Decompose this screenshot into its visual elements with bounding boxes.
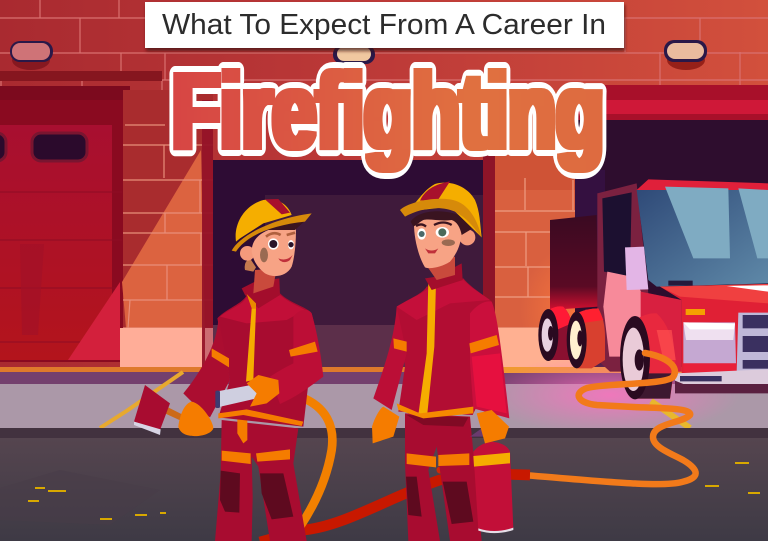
legs bbox=[405, 413, 482, 541]
brick pillar: right bbox=[483, 90, 660, 380]
jacket bbox=[373, 263, 509, 418]
bumper bbox=[675, 380, 768, 393]
orange hose: truck to road bbox=[440, 353, 696, 484]
truck box bbox=[550, 215, 598, 310]
lamp: left wall bbox=[10, 41, 53, 70]
firefighter: left bbox=[134, 199, 530, 541]
extinguisher bbox=[470, 426, 513, 533]
central garage opening bbox=[213, 160, 483, 372]
headlight bbox=[683, 322, 736, 363]
cab side bbox=[597, 183, 682, 372]
lamp: right wall bbox=[664, 40, 707, 70]
brick pillar: left bbox=[120, 90, 215, 367]
firefighter: right bbox=[372, 181, 513, 541]
right garage opening bbox=[575, 85, 768, 370]
rear wheel 1 bbox=[538, 306, 572, 361]
front wheel bbox=[620, 313, 676, 399]
red hose on ground bbox=[260, 473, 530, 541]
title: Firefighting: Firefighting bbox=[172, 50, 604, 171]
legs bbox=[215, 418, 307, 541]
hood and front bbox=[660, 284, 768, 373]
brick wall bbox=[0, 0, 768, 372]
orange hose bbox=[300, 397, 332, 527]
door windows bbox=[0, 133, 87, 161]
jacket bbox=[183, 278, 323, 427]
left garage door bbox=[0, 71, 162, 362]
fire truck bbox=[538, 179, 768, 399]
gloved hand on axe bbox=[178, 402, 213, 436]
nozzle bbox=[215, 384, 257, 408]
axe bbox=[134, 385, 190, 435]
lamp: centre wall bbox=[333, 45, 375, 64]
right glove bbox=[477, 410, 509, 443]
left glove bbox=[372, 407, 399, 443]
neck and head bbox=[411, 211, 475, 280]
cab roof bbox=[637, 179, 768, 190]
subtitle text: What To Expect From A Career In bbox=[162, 9, 606, 41]
ground: pavement and road bbox=[0, 355, 768, 541]
subtitle banner bbox=[145, 2, 624, 48]
mirror bbox=[625, 247, 648, 290]
windshield bbox=[637, 190, 768, 287]
road speckles bbox=[28, 462, 760, 520]
helmet bbox=[400, 181, 482, 237]
neck and head bbox=[240, 223, 296, 293]
gloved hand on nozzle bbox=[247, 375, 279, 407]
rear wheel 2 bbox=[567, 308, 605, 368]
helmet bbox=[232, 199, 312, 252]
title: Firefighting: Firefighting bbox=[172, 50, 604, 171]
grille bbox=[737, 313, 768, 372]
